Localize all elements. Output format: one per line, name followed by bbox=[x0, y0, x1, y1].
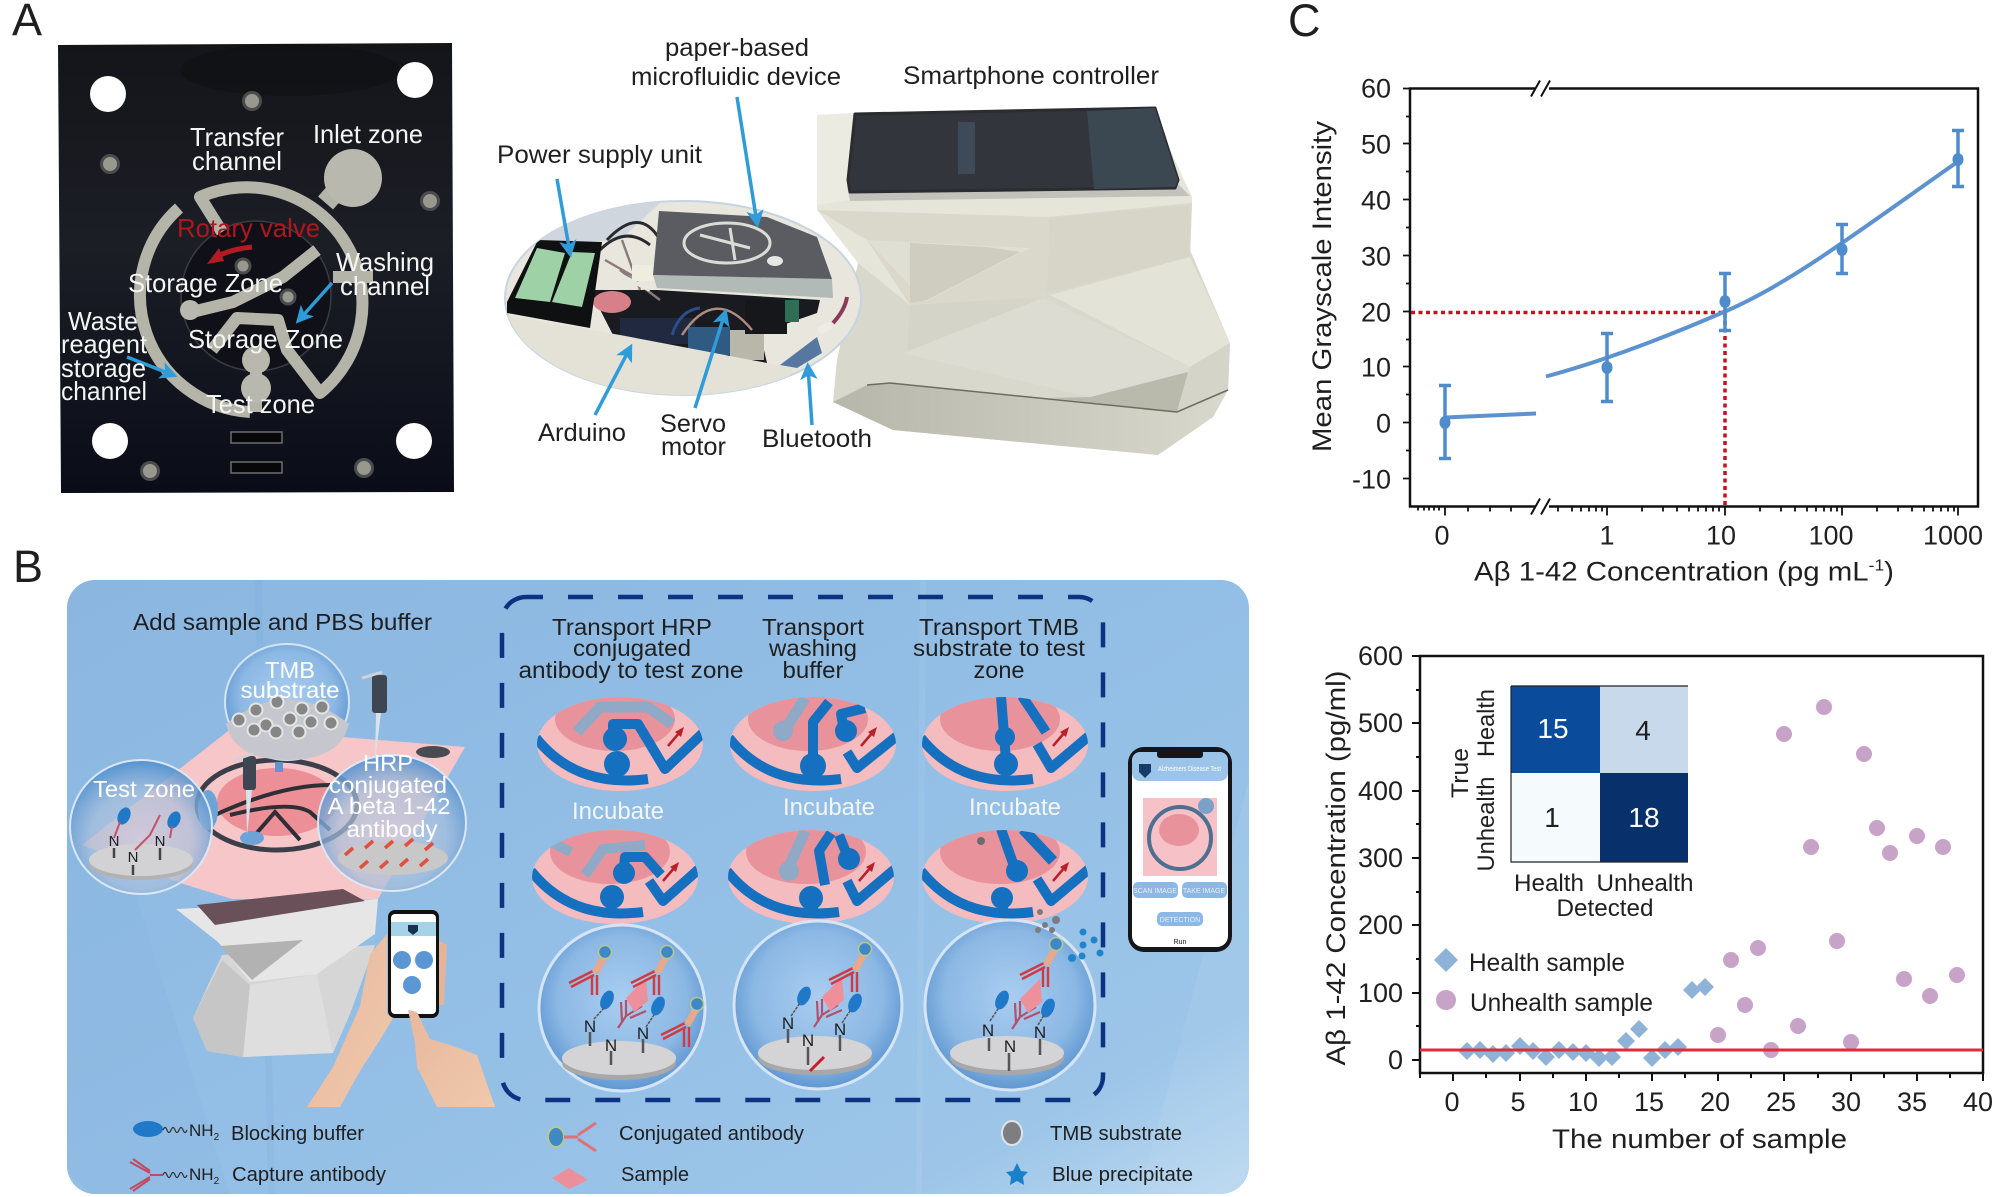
arrow: power supply unit bbox=[557, 179, 570, 253]
batteries bbox=[507, 240, 602, 328]
panel B: step titles: buffer bbox=[782, 657, 844, 683]
legend: blocking buffer: NH bbox=[189, 1121, 214, 1140]
chip labels: reagent bbox=[61, 329, 148, 359]
x tick labels: 10 bbox=[1568, 1087, 1598, 1117]
TMB reaction dots and blue precipitate bbox=[1035, 909, 1104, 962]
arrow: arduino bbox=[595, 348, 630, 415]
confusion matrix inset: Unhealth bbox=[1596, 870, 1694, 897]
panel B: phone app screen: TAKE IMAGE bbox=[1183, 888, 1225, 895]
x tick labels: 35 bbox=[1897, 1087, 1927, 1117]
y tick labels: 0 bbox=[1388, 1045, 1403, 1075]
confusion matrix inset: Detected bbox=[1556, 895, 1654, 922]
panel B: hand holding phone bbox=[307, 910, 495, 1107]
panel A: device labels: Servo bbox=[660, 410, 726, 438]
chip labels: Storage Zone bbox=[128, 268, 283, 298]
y tick labels: 30 bbox=[1361, 242, 1391, 272]
orb: col 2 molecules: N bbox=[802, 1031, 814, 1050]
panel B: HRP antibody bubble: conjugated bbox=[329, 772, 447, 798]
y tick labels: 400 bbox=[1358, 776, 1403, 806]
chart: calibration curve bbox=[1307, 74, 1983, 586]
panel B: test zone bubble: N bbox=[109, 833, 119, 850]
x tick labels: 100 bbox=[1808, 520, 1854, 550]
y tick labels: 10 bbox=[1361, 352, 1391, 382]
legend: sample bbox=[552, 1164, 689, 1189]
confusion matrix inset: 18 bbox=[1628, 802, 1660, 833]
lens: col 1 incubated bbox=[532, 830, 698, 924]
smartphone bbox=[847, 108, 1190, 201]
blue pointer arrow to washing channel bbox=[299, 283, 332, 320]
legend: blocking buffer: 2 bbox=[214, 1132, 220, 1143]
incubate labels: Incubate bbox=[783, 794, 875, 821]
panel B: phone app screen: Alzheimers Disease Test bbox=[1158, 764, 1222, 773]
confusion matrix inset: 1 bbox=[1544, 802, 1560, 833]
panel B: test zone bubble: Test zone bbox=[93, 776, 195, 802]
panel B: HRP antibody bubble: HRP bbox=[363, 750, 413, 776]
confusion matrix inset: Health bbox=[1514, 870, 1584, 897]
unhealth sample circles bbox=[1710, 699, 1965, 1058]
chip labels: storage bbox=[61, 353, 146, 383]
panel B: step titles: Transport HRP bbox=[552, 614, 712, 640]
chip labels: Washing bbox=[336, 247, 434, 277]
chip labels: Test zone bbox=[206, 389, 315, 419]
arrow: paper-based device bbox=[737, 97, 757, 223]
panel B: TMB substrate bubble: TMB bbox=[265, 657, 315, 683]
chip labels: Rotary valve bbox=[177, 213, 320, 243]
chip labels bbox=[61, 119, 434, 419]
x tick labels: 25 bbox=[1766, 1087, 1796, 1117]
panel B: phone app screen: DETECTION bbox=[1160, 917, 1200, 924]
x tick labels: 15 bbox=[1634, 1087, 1664, 1117]
orb: col 1 molecules: N bbox=[584, 1017, 596, 1036]
lens: col 3 incubated bbox=[922, 830, 1088, 922]
data points with error bars bbox=[1439, 130, 1964, 458]
legend: TMB substrate bbox=[1002, 1121, 1182, 1145]
legend: TMB substrate: TMB substrate bbox=[1050, 1123, 1182, 1145]
panel B: step titles: Transport TMB bbox=[919, 614, 1079, 640]
panel B: phone app screen: Run bbox=[1174, 939, 1187, 946]
y tick labels: 300 bbox=[1358, 843, 1403, 873]
legend: blue precipitate: Blue precipitate bbox=[1052, 1164, 1193, 1186]
chip labels: Inlet zone bbox=[313, 119, 423, 149]
legend: blocking buffer: Blocking buffer bbox=[231, 1123, 364, 1145]
legend: capture antibody bbox=[130, 1159, 386, 1191]
upper block bbox=[817, 107, 1192, 305]
rotary arrow bbox=[207, 247, 252, 264]
orb: col 3 molecules: N bbox=[982, 1021, 994, 1040]
icon: pipettes bbox=[234, 672, 387, 835]
confusion matrix inset: Unhealth bbox=[1473, 776, 1500, 872]
x axis title: -1 bbox=[1869, 558, 1884, 574]
x tick labels: 1000 bbox=[1923, 520, 1983, 550]
servo wires bbox=[682, 309, 752, 335]
panel B: step titles: antibody to test zone bbox=[518, 657, 744, 683]
x tick labels: 0 bbox=[1434, 520, 1450, 550]
lens: col 2 incubated bbox=[728, 830, 894, 923]
orb: col 2 molecules bbox=[734, 921, 902, 1089]
panel B: step titles bbox=[518, 614, 1086, 683]
x tick labels: 40 bbox=[1963, 1087, 1993, 1117]
orb: col 3 molecules: N bbox=[1004, 1037, 1016, 1056]
lower body bbox=[833, 250, 1230, 455]
panel A: device labels: microfluidic device bbox=[631, 63, 841, 91]
y axis title: Mean Grayscale Intensity bbox=[1307, 120, 1337, 452]
slots bbox=[231, 432, 282, 473]
y tick labels: 200 bbox=[1358, 910, 1403, 940]
panel A: device labels: Power supply unit bbox=[497, 141, 702, 169]
axes frame bbox=[1403, 80, 1978, 516]
chip labels: channel bbox=[340, 271, 430, 301]
y tick labels: 20 bbox=[1361, 298, 1391, 328]
lens: col 2 top bbox=[730, 697, 896, 791]
panel B: phone app screen: SCAN IMAGE bbox=[1133, 888, 1177, 895]
incubate labels bbox=[572, 794, 1061, 825]
panel A: device labels: Bluetooth bbox=[762, 425, 872, 453]
panel B: legend bbox=[130, 1121, 1193, 1191]
x axis title: Aβ 1-42 Concentration (pg mL bbox=[1474, 556, 1836, 586]
red cutoff line bbox=[1420, 1048, 1983, 1052]
bluetooth module bbox=[780, 337, 822, 368]
x tick labels bbox=[1444, 1087, 1993, 1117]
chip labels: channel bbox=[61, 376, 147, 406]
scatter legend: Health sample bbox=[1469, 949, 1625, 977]
panel B: TMB substrate bubble: substrate bbox=[240, 677, 340, 703]
confusion matrix inset: 15 bbox=[1537, 713, 1569, 744]
x tick labels: 1 bbox=[1599, 520, 1615, 550]
paper channels bbox=[140, 187, 373, 412]
panel A: 3D printed device with smartphone bbox=[817, 107, 1230, 455]
legend: capture antibody: Capture antibody bbox=[232, 1164, 386, 1186]
orb: col 1 molecules: N bbox=[637, 1024, 649, 1043]
axes frame bbox=[1412, 656, 1983, 1081]
y tick labels: 100 bbox=[1358, 978, 1403, 1008]
panel B: test zone bubble: N bbox=[128, 849, 138, 866]
panel B: step titles: substrate to test bbox=[913, 635, 1086, 661]
fit line bbox=[1445, 162, 1958, 418]
y tick labels: 600 bbox=[1358, 641, 1403, 671]
panel B: HRP antibody bubble bbox=[318, 750, 466, 891]
confusion matrix inset: Health bbox=[1473, 689, 1500, 757]
y tick labels: 40 bbox=[1361, 186, 1391, 216]
legend: capture antibody: NH bbox=[189, 1165, 214, 1184]
panel A: device labels: Smartphone controller bbox=[903, 62, 1159, 90]
panel B: gray device illustration bbox=[176, 889, 378, 1057]
panel B: HRP antibody bubble: antibody bbox=[346, 816, 438, 842]
y tick labels bbox=[1358, 641, 1403, 1075]
orb: col 1 molecules: N bbox=[605, 1036, 617, 1055]
confusion matrix inset: 4 bbox=[1635, 715, 1651, 746]
orb: col 2 molecules: N bbox=[834, 1020, 846, 1039]
legend: capture antibody: 2 bbox=[214, 1176, 220, 1187]
panel B: dashed process box bbox=[502, 597, 1103, 1100]
panel B: step titles: Transport bbox=[762, 614, 865, 640]
front cream wall bbox=[500, 315, 793, 400]
y tick labels: -10 bbox=[1352, 464, 1391, 494]
scatter legend bbox=[1434, 948, 1653, 1017]
panel letter B: B bbox=[13, 541, 43, 592]
orb: col 1 molecules bbox=[539, 925, 705, 1091]
panel B: background light streaks bbox=[67, 580, 1249, 1194]
panel B: TMB substrate bubble bbox=[225, 644, 349, 760]
lens: col 3 top bbox=[922, 697, 1088, 791]
red dotted readout bbox=[1411, 312, 1725, 506]
blue pointer arrow to waste channel bbox=[127, 357, 173, 375]
chart: patient sample scatter bbox=[1321, 641, 1993, 1154]
panel B: test zone bubble bbox=[70, 760, 212, 894]
panel A: device labels: Arduino bbox=[538, 419, 626, 447]
chip labels: channel bbox=[192, 146, 282, 176]
orb: col 3 molecules bbox=[925, 920, 1095, 1090]
orb: col 3 molecules: N bbox=[1034, 1023, 1046, 1042]
electronics dark bay bbox=[590, 290, 820, 363]
orb: col 2 molecules: N bbox=[782, 1014, 794, 1033]
confusion matrix inset bbox=[1447, 686, 1694, 922]
panel B: heading add sample: Add sample and PBS buffer bbox=[133, 609, 432, 635]
circuit board bbox=[620, 318, 695, 344]
panel B: test zone bubble: N bbox=[155, 833, 165, 850]
legend: blocking buffer bbox=[133, 1121, 364, 1145]
legend: sample: Sample bbox=[621, 1164, 689, 1186]
panel B: phone app screen bbox=[1128, 747, 1232, 952]
scatter legend: Unhealth sample bbox=[1470, 989, 1653, 1017]
chip labels: Storage Zone bbox=[188, 324, 343, 354]
y tick labels: 50 bbox=[1361, 130, 1391, 160]
legend: conjugated antibody: Conjugated antibody bbox=[619, 1123, 804, 1145]
x axis title: The number of sample bbox=[1552, 1124, 1847, 1154]
panel B: HRP antibody bubble: A beta 1-42 bbox=[328, 793, 450, 819]
grey cover plate with chip bbox=[653, 275, 833, 298]
lens: col 1 top bbox=[537, 697, 703, 791]
incubate labels: Incubate bbox=[969, 794, 1061, 821]
panel B: workflow background bbox=[67, 580, 1249, 1194]
x tick labels bbox=[1434, 520, 1983, 550]
panel A: opened device lens photo bbox=[500, 201, 861, 400]
panel A: device labels: paper-based bbox=[665, 34, 809, 62]
x tick labels: 0 bbox=[1444, 1087, 1460, 1117]
y tick labels: 500 bbox=[1358, 708, 1403, 738]
panel B: exploded pink chip bbox=[82, 728, 465, 899]
health sample diamonds bbox=[1458, 978, 1714, 1067]
y tick labels bbox=[1352, 74, 1391, 494]
y tick labels: 0 bbox=[1376, 408, 1391, 438]
screws bbox=[102, 92, 438, 480]
panel B: step titles: conjugated bbox=[573, 635, 691, 661]
panel A: device labels bbox=[497, 34, 1159, 461]
chip labels: Transfer bbox=[190, 122, 284, 152]
arrow: bluetooth bbox=[808, 367, 812, 425]
y tick labels: 60 bbox=[1361, 74, 1391, 104]
x tick labels: 5 bbox=[1510, 1087, 1526, 1117]
x tick labels: 20 bbox=[1700, 1087, 1730, 1117]
legend: conjugated antibody bbox=[548, 1123, 804, 1151]
arrow: servo motor bbox=[695, 313, 725, 408]
panel B: step titles: washing bbox=[768, 635, 857, 661]
x axis title: ) bbox=[1884, 556, 1894, 586]
panel A: device labels: motor bbox=[661, 433, 726, 461]
chip labels: Waste bbox=[68, 306, 138, 336]
x tick labels: 10 bbox=[1706, 520, 1736, 550]
corner mounting holes bbox=[90, 62, 433, 459]
incubate labels: Incubate bbox=[572, 798, 664, 825]
x tick labels: 30 bbox=[1831, 1087, 1861, 1117]
panel B: step titles: zone bbox=[974, 657, 1024, 683]
y axis title: Aβ 1-42 Concentration (pg/ml) bbox=[1321, 670, 1351, 1066]
confusion matrix inset: True bbox=[1447, 748, 1474, 798]
panel A: microfluidic chip photo bbox=[58, 43, 454, 493]
